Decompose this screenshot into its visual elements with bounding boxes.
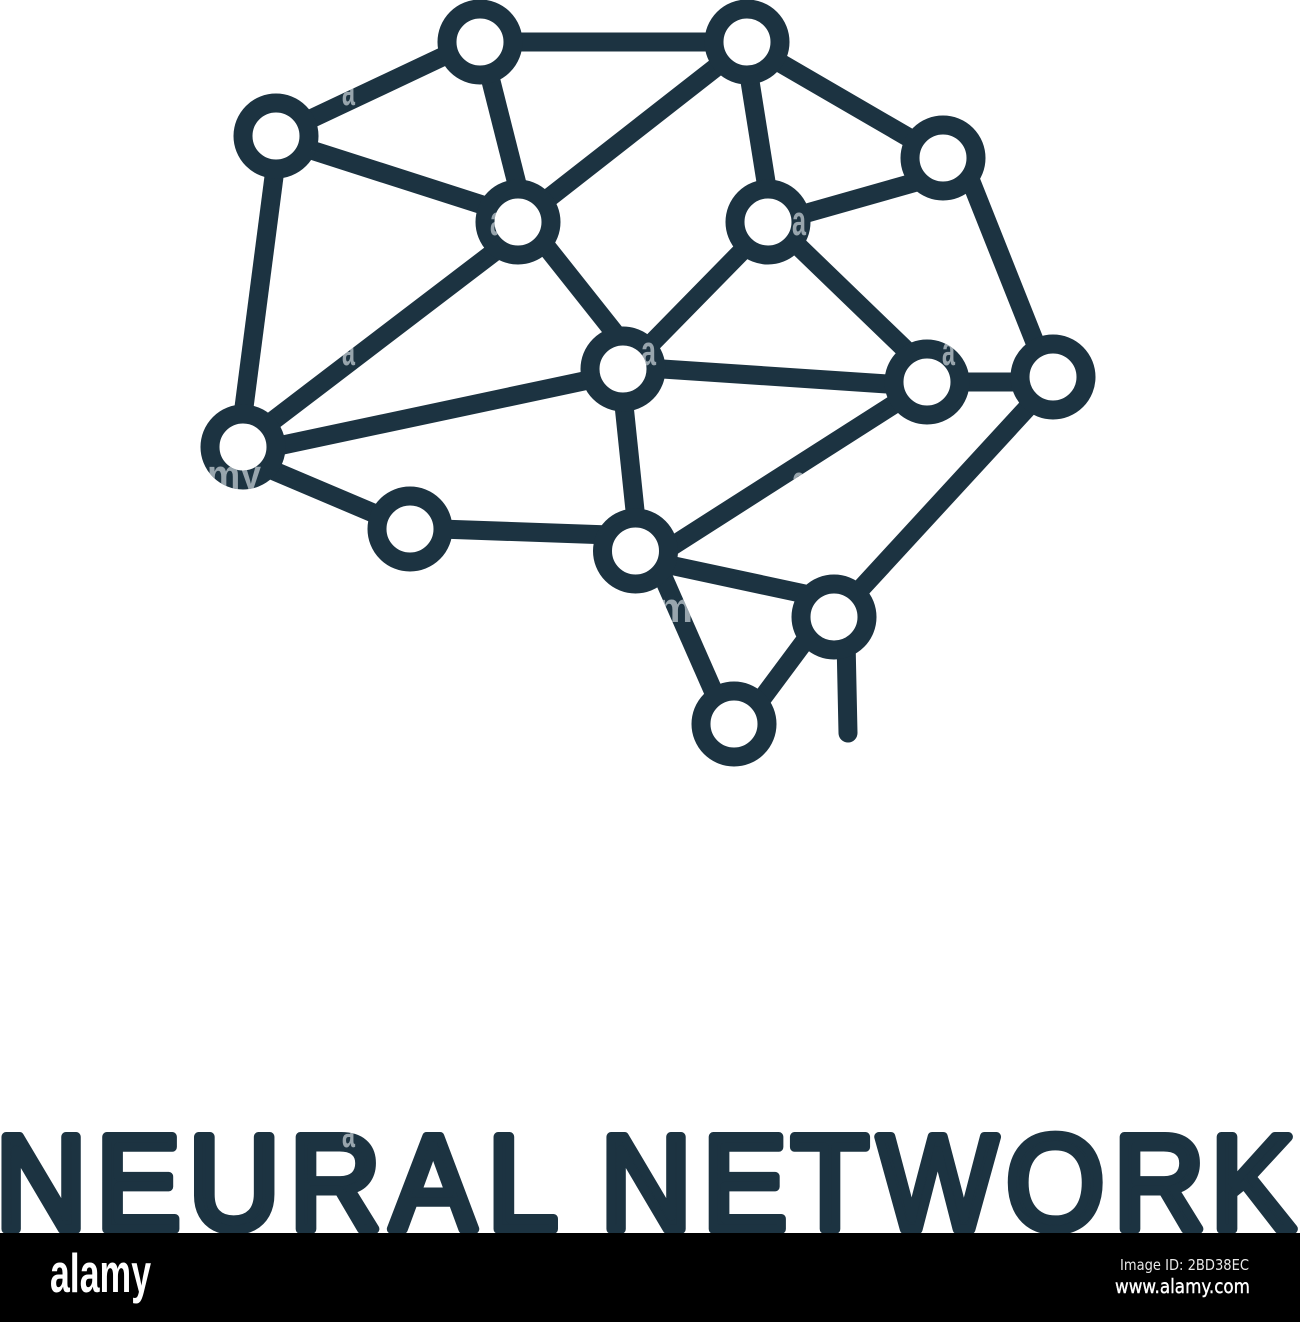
title: NEURAL NETWORK — [0, 1107, 1295, 1258]
logo: alamy: alamy — [50, 1242, 151, 1304]
image id: Image ID: 2BD38EC — [1120, 1256, 1249, 1274]
website: www.alamy.com — [1115, 1275, 1250, 1298]
watermark fragments: a — [342, 327, 355, 374]
watermark fragments: a — [792, 457, 806, 504]
watermark fragments: a — [342, 67, 355, 114]
watermark fragments: a — [342, 1109, 355, 1156]
watermark fragments: a — [490, 197, 504, 244]
watermark fragments: a — [792, 197, 806, 244]
watermark fragments: m — [657, 584, 693, 631]
network nodes — [210, 9, 1086, 757]
watermark fragments: a — [942, 327, 955, 374]
network connections — [243, 42, 1038, 733]
watermark fragments: my — [207, 451, 262, 498]
icon: neural network brain — [210, 9, 1086, 757]
watermark fragments — [207, 67, 955, 1156]
watermark fragments: a — [641, 327, 656, 374]
footer bar — [0, 1233, 1300, 1322]
